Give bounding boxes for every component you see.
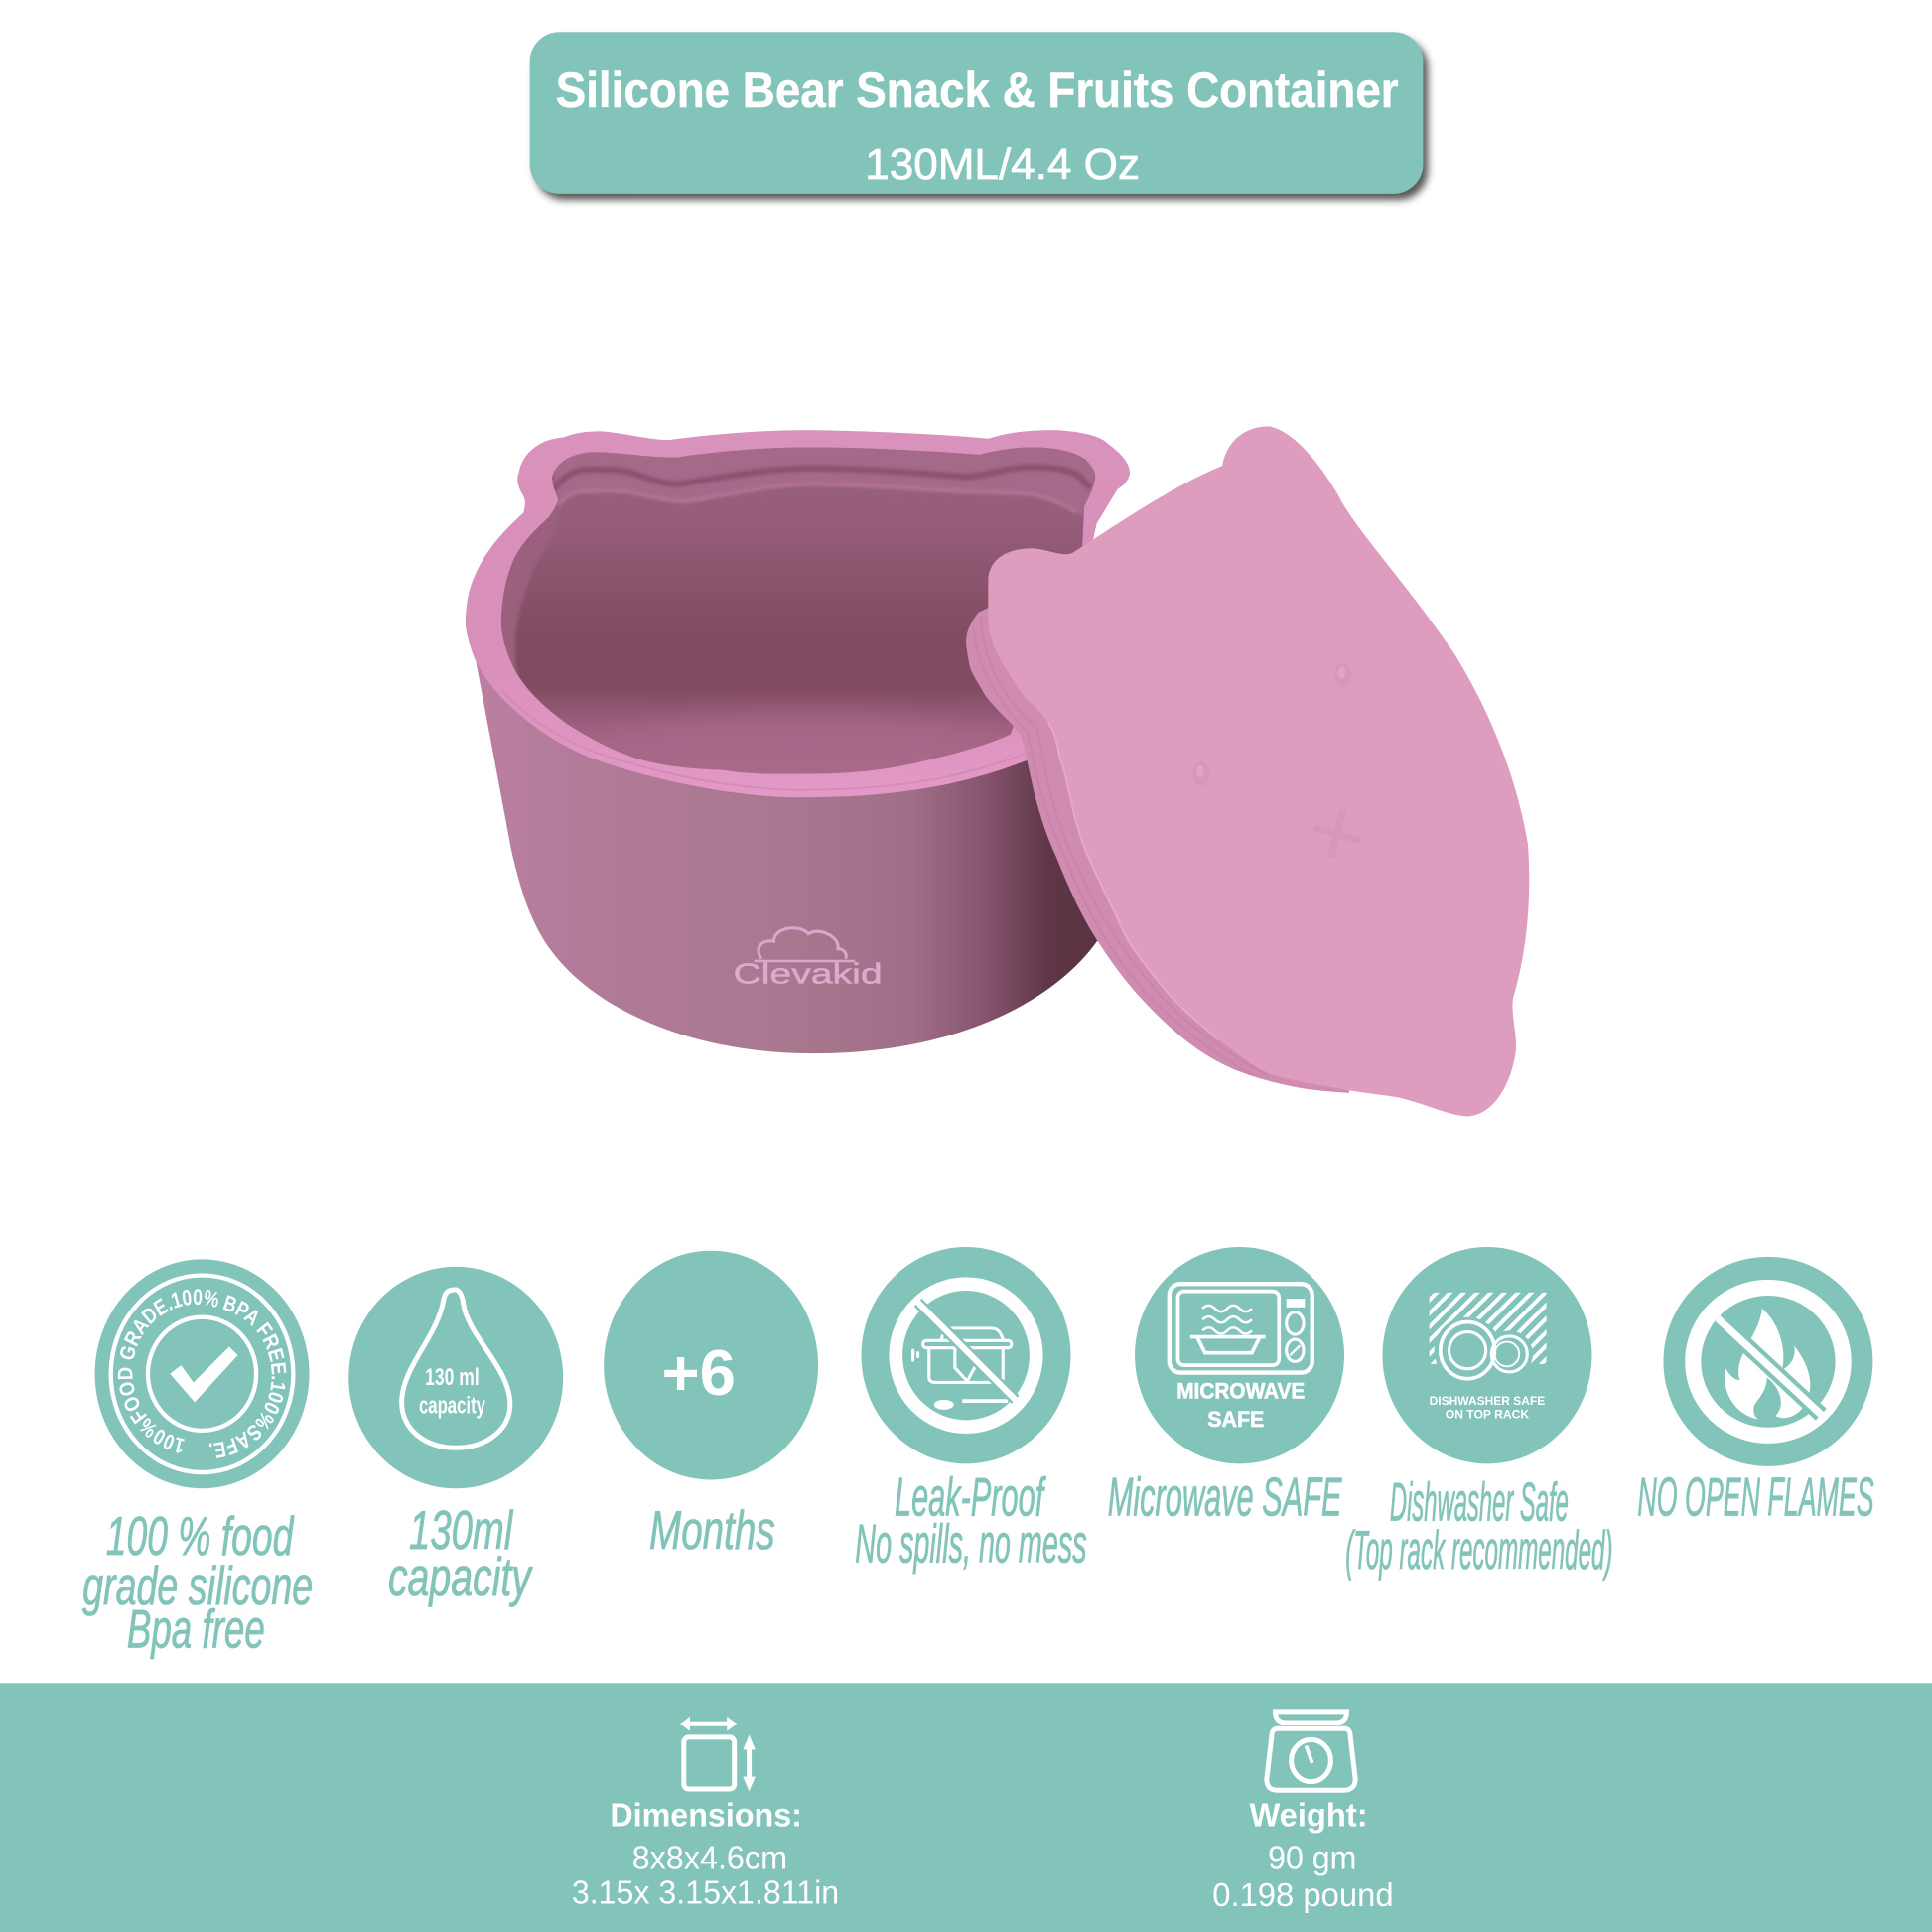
badge: microwave safe: SAFE: [1207, 1407, 1264, 1432]
badge: no open flames: [1663, 1257, 1872, 1466]
badge: +6 months: [604, 1251, 818, 1480]
badge: 130 ml capacity: capacity: [419, 1393, 485, 1419]
caption: food grade: Bpa free: [127, 1598, 265, 1659]
text: weight: Weight:: [1249, 1797, 1368, 1834]
badge: microwave safe: [1135, 1247, 1344, 1463]
caption: months: Months: [649, 1500, 775, 1561]
text: dimensions: 8x8x4.6cm: [632, 1841, 787, 1877]
badge: 100% food grade: [95, 1259, 310, 1489]
text: weight: 0.198 pound: [1212, 1877, 1394, 1914]
text: weight: [1212, 1797, 1394, 1914]
caption: capacity: 130ml: [409, 1500, 514, 1561]
caption: capacity: [388, 1500, 534, 1607]
lid emboss: eyes and nose: [1192, 663, 1362, 860]
text: dimensions: Dimensions:: [610, 1797, 802, 1834]
logo: Clevakid: [733, 928, 883, 990]
text: dimensions: [572, 1797, 839, 1911]
badge: dishwasher safe: [1382, 1247, 1592, 1463]
badge: dishwasher safe: DISHWASHER SAFE: [1430, 1395, 1545, 1408]
icon: weight scale: [1267, 1712, 1355, 1790]
infographic canvas: (Top rack recommended): [1345, 1520, 1613, 1581]
text: weight: 90 gm: [1268, 1841, 1356, 1877]
text: dimensions: 3.15x 3.15x1.811in: [572, 1874, 839, 1911]
caption: dishwasher safe: [1345, 1471, 1613, 1581]
badge: 130 ml capacity: [348, 1267, 563, 1488]
caption: food grade: [82, 1506, 313, 1659]
caption: microwave safe: Microwave SAFE: [1108, 1467, 1342, 1528]
caption: leak-proof: [855, 1467, 1087, 1575]
caption: dishwasher safe: Dishwasher Safe: [1390, 1471, 1569, 1532]
product: bear container bowl: [466, 430, 1130, 1053]
title banner: [530, 32, 1428, 200]
badge: +6 months: +6: [661, 1337, 736, 1409]
title: Silicone Bear Snack & Fruits Container: [556, 63, 1399, 118]
caption: food grade: 100 % food: [106, 1506, 294, 1567]
badge: 130 ml capacity: 130 ml: [425, 1364, 480, 1390]
caption: food grade: grade silicone: [82, 1556, 313, 1616]
badge: dishwasher safe: ON TOP RACK: [1446, 1408, 1530, 1421]
badge: microwave safe: MICROWAVE: [1176, 1379, 1305, 1404]
product: bear lid: [966, 426, 1529, 1116]
caption: leak-proof: Leak-Proof: [895, 1467, 1046, 1528]
bottom band: specifications: [0, 1683, 1932, 1932]
caption: capacity: capacity: [388, 1547, 534, 1607]
badge: 100% food grade: 100%FOOD GRADE.100% BPA FREE.100%SAFE.: [117, 1289, 286, 1458]
logo: Clevakid: Clevakid: [733, 958, 883, 990]
subtitle: 130ML/4.4 Oz: [865, 141, 1140, 189]
badge: leak-proof: [862, 1247, 1070, 1463]
icon: dimensions: [680, 1717, 756, 1792]
caption: leak-proof: No spills, no mess: [855, 1514, 1087, 1575]
